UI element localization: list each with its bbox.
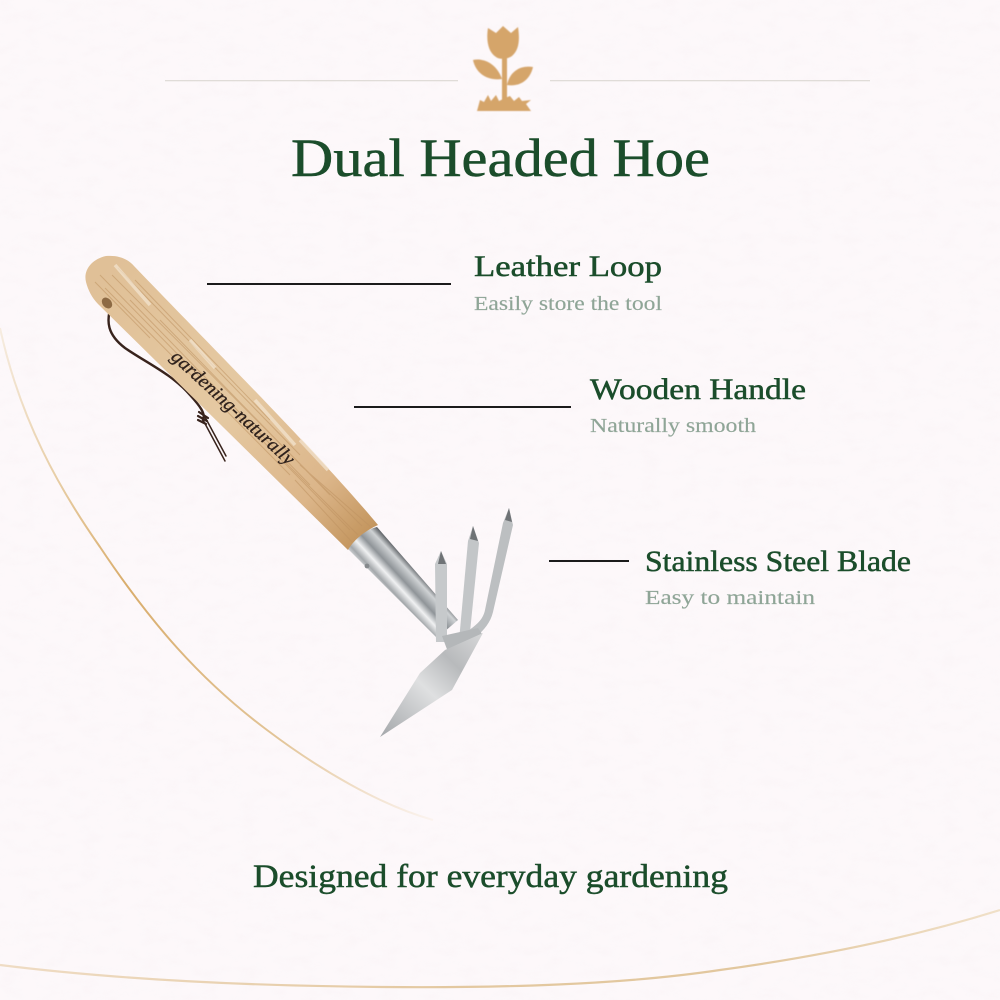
tine 3 (468, 508, 513, 640)
icon: tulip (473, 26, 533, 111)
callout: stainless steel blade (549, 545, 911, 609)
gold curve: left sweep (0, 328, 433, 820)
callout: leather loop: Leather Loop (474, 250, 662, 283)
gold curve: bottom sweep (0, 910, 1000, 987)
hoe blade (380, 633, 483, 737)
handle hole (100, 296, 114, 310)
tine bracket (442, 628, 482, 652)
handle logo text: gardening-naturally (167, 346, 299, 470)
header divider: left (165, 80, 458, 81)
neck rivet (365, 564, 369, 568)
illustration: dual headed hoe (85, 256, 513, 737)
header divider: right (550, 80, 870, 81)
tine 1 (435, 551, 447, 642)
callout: wooden handle: Naturally smooth (590, 415, 756, 437)
tine 2 (459, 526, 479, 642)
callout: wooden handle: Wooden Handle (590, 373, 806, 406)
leather loop (108, 303, 226, 461)
handle grain (95, 268, 372, 542)
tagline: Designed for everyday gardening (253, 859, 728, 895)
steel neck (348, 527, 458, 638)
callout: stainless steel blade: Stainless Steel Blade (645, 545, 911, 578)
title: Dual Headed Hoe (291, 128, 710, 188)
callout: leather loop (207, 250, 663, 315)
tine shading (438, 508, 512, 564)
wooden handle (85, 256, 378, 550)
callout: wooden handle (354, 373, 806, 437)
callout: stainless steel blade: Easy to maintain (645, 587, 815, 609)
callout: leather loop: Easily store the tool (474, 293, 663, 315)
